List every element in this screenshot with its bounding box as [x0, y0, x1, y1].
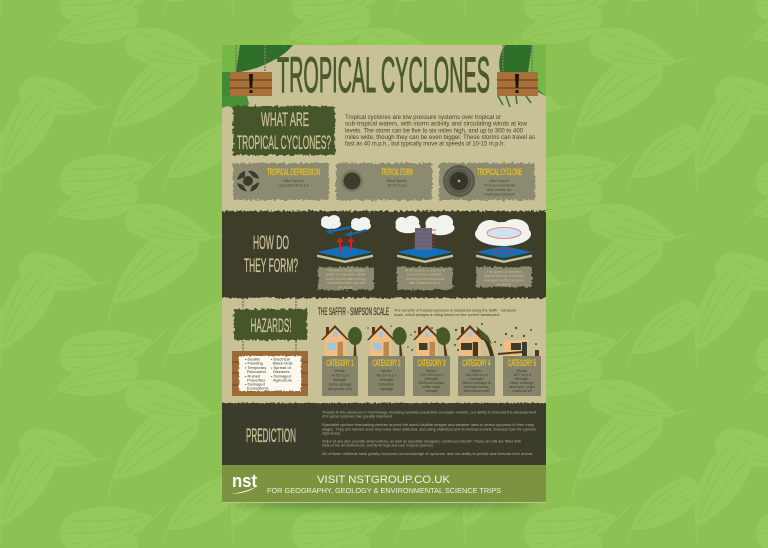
panel: category 3: Well built homes	[419, 381, 445, 385]
panel: category 4: 130-156 m.p.h	[465, 373, 488, 377]
text box: warm ocean: forms clouds after coming	[326, 277, 366, 281]
text box: wind speed	[476, 267, 532, 287]
panel: hazards list board: • Flooding	[245, 361, 263, 366]
panel: category 1: 74-95 m.p.h	[331, 374, 349, 378]
panel: category 2: Strength:	[379, 378, 394, 382]
panel: hazards list board: Relocation	[247, 369, 266, 374]
panel: category 4: Winds:	[471, 369, 482, 373]
text box: wind speed: around the eye of a storm	[484, 274, 524, 278]
panel: category 3: Winds:	[426, 369, 437, 373]
panel: tropical cyclone: Also Known As:	[487, 188, 512, 192]
icon: cyclone	[443, 165, 475, 197]
panel: category 2	[368, 356, 405, 396]
panel: tropical cyclone	[439, 163, 535, 200]
panel: hazards list board: • Deaths	[245, 357, 260, 362]
panel: tropical storm: Wind Speed:	[387, 179, 407, 183]
panel: hazards list board: Properties	[247, 378, 265, 383]
panel: hazards list board: • Temporary	[245, 365, 266, 370]
panel: category 1: and power cuts	[328, 387, 352, 391]
panel: hazards list board: Diseases	[273, 369, 289, 374]
panel: hazards list board: Ecosystems	[247, 386, 269, 391]
text box: low pressure: forming a towering cloud	[406, 277, 444, 281]
heading: how do they form: HOW DO	[253, 233, 289, 254]
text block: scale description: The severity of tropical cyclones is measured using the Saffir - Simpson	[394, 308, 516, 312]
panel: what are tropical cyclones heading	[233, 106, 335, 155]
diagram: cyclone forms	[475, 219, 532, 263]
text block: prediction details: stages. They are tracked once they have been detected, and using statistical and numerical models, forecast how the cyclone	[322, 426, 536, 431]
panel: how do they form: THEY FORM?	[244, 256, 298, 277]
panel: prediction	[216, 403, 552, 466]
footer text: visit: VISIT NSTGROUP.CO.UK	[317, 474, 451, 486]
text block: prediction details	[322, 410, 537, 456]
panel: category 5: Winds:	[517, 369, 527, 373]
panel: category 5: CATEGORY 5	[508, 358, 536, 368]
panel: tropical depression: TROPICAL DEPRESSION	[267, 167, 320, 177]
diagram: low pressure column	[396, 215, 454, 263]
panel: category 4: trees blown over	[464, 389, 490, 393]
text block: intro paragraph: fast as 40 m.p.h., but typically move at speeds of 10-15 m.p.h.	[345, 141, 505, 148]
footer band	[222, 465, 546, 502]
panel: category 4: Strength:	[469, 377, 484, 381]
panel: tropical cyclone: TROPICAL CYCLONE	[477, 167, 522, 177]
illustration: category 1 house	[321, 325, 362, 356]
text block: prediction details: state-of the art instruments, and fly through and over tropical cyclones.	[322, 443, 434, 448]
panel: category 4: well built homes,	[464, 385, 489, 389]
text block: prediction details: Thanks to the advances in technology, including weather prediction computer models, our ability to forecast the development	[322, 410, 537, 414]
illustration: category 5 destroyed house	[498, 327, 539, 356]
panel: category 1: CATEGORY 1	[326, 358, 354, 368]
panel: category 4	[458, 356, 495, 396]
poster shadow	[234, 496, 534, 510]
text block: prediction details: of tropical cyclones has greatly improved.	[322, 414, 393, 419]
panel: category 2: Winds:	[381, 369, 392, 373]
foliage top left	[222, 45, 293, 109]
panel: category 5: Strength:	[515, 377, 529, 381]
text block: intro paragraph	[345, 114, 535, 148]
panel: hazards list board	[232, 351, 308, 396]
panel: what are tropical cyclones heading: WHAT ARE	[261, 110, 309, 131]
panel: hazards list board: • Ruined	[245, 373, 260, 378]
panel: category 4: Severe damage to	[462, 381, 491, 385]
text block: prediction details: Specialist cyclone forecasting centres around the world ulsatlite images and weather data to detect cyclones in their early	[322, 422, 534, 427]
foliage top right	[498, 45, 546, 107]
panel: hazards list board: • Damaged	[271, 373, 291, 378]
panel: tropical cyclone: 74 m.p.h and above	[484, 184, 515, 188]
text box: warm ocean: water to evaporate, which	[326, 273, 366, 277]
panel: category 3	[413, 356, 450, 396]
panel: category 1	[322, 356, 358, 396]
poster: TROPICAL CYCLONES?	[237, 133, 331, 154]
panel: category 5: 157+ m.p.h	[513, 373, 531, 377]
panel: tropical storm: TROPICAL STORM	[382, 167, 412, 177]
panel: category 2: CATEGORY 2	[372, 358, 400, 368]
panel: hazards list board: Black-Outs	[273, 361, 293, 366]
icon: storm	[341, 170, 363, 192]
heading: how do they form	[244, 233, 298, 277]
panel: tropical depression: Less than 39 m.p.h	[278, 184, 309, 188]
panel: hazards list board: • Spread of	[271, 365, 292, 370]
text block: prediction details: All of these methods have greatly improved our knowledge of cyclones, and our ability to predict and forecast their arrival.	[322, 451, 533, 456]
panel: category 3: 111-129 m.p.h	[420, 373, 443, 377]
panel: hazards list board: Agriculture	[273, 378, 293, 383]
panel: category 3: suffer major	[422, 385, 442, 389]
panel: tropical storm	[336, 163, 432, 200]
text block: scale description: scale, which assigns a rating based on the current windspeed.	[394, 313, 500, 317]
panel: category 2: damage	[380, 387, 393, 391]
panel: category 5: Many buildings	[510, 381, 534, 385]
panel: category 5: destroyed, major	[509, 385, 536, 389]
panel: category 2: Extensive	[379, 382, 394, 386]
panel: tropical cyclone: Hurricane/Typhoon	[484, 192, 515, 196]
text box: low pressure: low pressure develops,	[407, 273, 443, 277]
diagram: warm air rising	[317, 215, 373, 263]
text box: wind speed: increases as the pressure	[484, 278, 524, 282]
chains	[243, 298, 296, 351]
illustration: category 3 house	[411, 325, 456, 357]
panel: category 5	[503, 356, 541, 396]
panel: category 3: damage	[425, 389, 438, 393]
panel: tropical depression: Wind Speed:	[283, 179, 304, 183]
panel: hazards list board: • Electrical	[271, 357, 290, 362]
illustration: category 2 house	[367, 325, 412, 356]
logo: nst: nst	[232, 471, 257, 491]
text box: warm ocean: into contact with the cool	[327, 281, 365, 285]
text box: warm ocean: The warm ocean causes	[327, 268, 365, 272]
text box: warm ocean: air above.	[338, 285, 354, 289]
text block: scale description	[394, 308, 516, 317]
poster	[216, 45, 552, 503]
text box: warm ocean	[318, 267, 374, 290]
panel: category 1: Strength:	[333, 378, 347, 382]
text block: intro paragraph: Tropical cyclones are low pressure systems over tropical or	[345, 114, 501, 121]
panel: category 4: CATEGORY 4	[462, 358, 490, 368]
panel: category 2: 96-110 m.p.h	[376, 374, 397, 378]
icon: depression swirl	[237, 171, 259, 192]
illustration: category 4 damaged house	[455, 323, 496, 356]
text block: prediction details: Ships at sea also provide observations, as well as specially designed, reinforced aircraft. These aircraft are fitted with	[322, 438, 521, 444]
heading sign: hazards: HAZARDS!	[250, 316, 292, 337]
panel: category 5: roads cut off	[512, 389, 532, 393]
text box: low pressure	[397, 267, 453, 290]
text box: low pressure: with winds around it.	[409, 281, 441, 285]
panel: tropical cyclone: Wind Speed:	[489, 179, 510, 183]
text block: intro paragraph: sub-tropical waters, with storm activity and circulating winds at low	[345, 121, 528, 128]
footer text: trips: FOR GEOGRAPHY, GEOLOGY & ENVIRONMENTAL SCIENCE TRIPS	[267, 486, 501, 495]
panel: category 1: Some damage	[329, 382, 351, 386]
panel: category 3: CATEGORY 3	[418, 358, 446, 368]
panel: tropical storm: 39-73 m.p.h	[387, 184, 407, 188]
text box: wind speed: weakens.	[497, 282, 511, 286]
text box: wind speed: The speed of the wind	[487, 270, 521, 274]
text box: low pressure: At the centre, a column of	[405, 268, 445, 272]
hanging wood sign left	[230, 45, 272, 96]
panel: category 1: Winds:	[335, 369, 345, 373]
text block: prediction details: might develop.	[322, 431, 341, 436]
heading sign: hazards	[234, 309, 307, 340]
panel: category 3: Strength:	[424, 377, 439, 381]
text block: intro paragraph: levels. The storm can be five to six miles high, and up to 300 to 400	[345, 127, 524, 134]
panel: hazards list board: • Damaged	[245, 382, 265, 387]
panel: prediction: PREDICTION	[246, 426, 296, 447]
panel: tropical depression	[233, 163, 329, 200]
poster: THE SAFFIR - SIMPSON SCALE	[318, 306, 389, 318]
text block: intro paragraph: miles wide, though they can be even bigger. These storms can travel as	[345, 134, 535, 141]
hanging wood sign right	[497, 45, 538, 96]
panel: how do they form	[216, 211, 552, 298]
